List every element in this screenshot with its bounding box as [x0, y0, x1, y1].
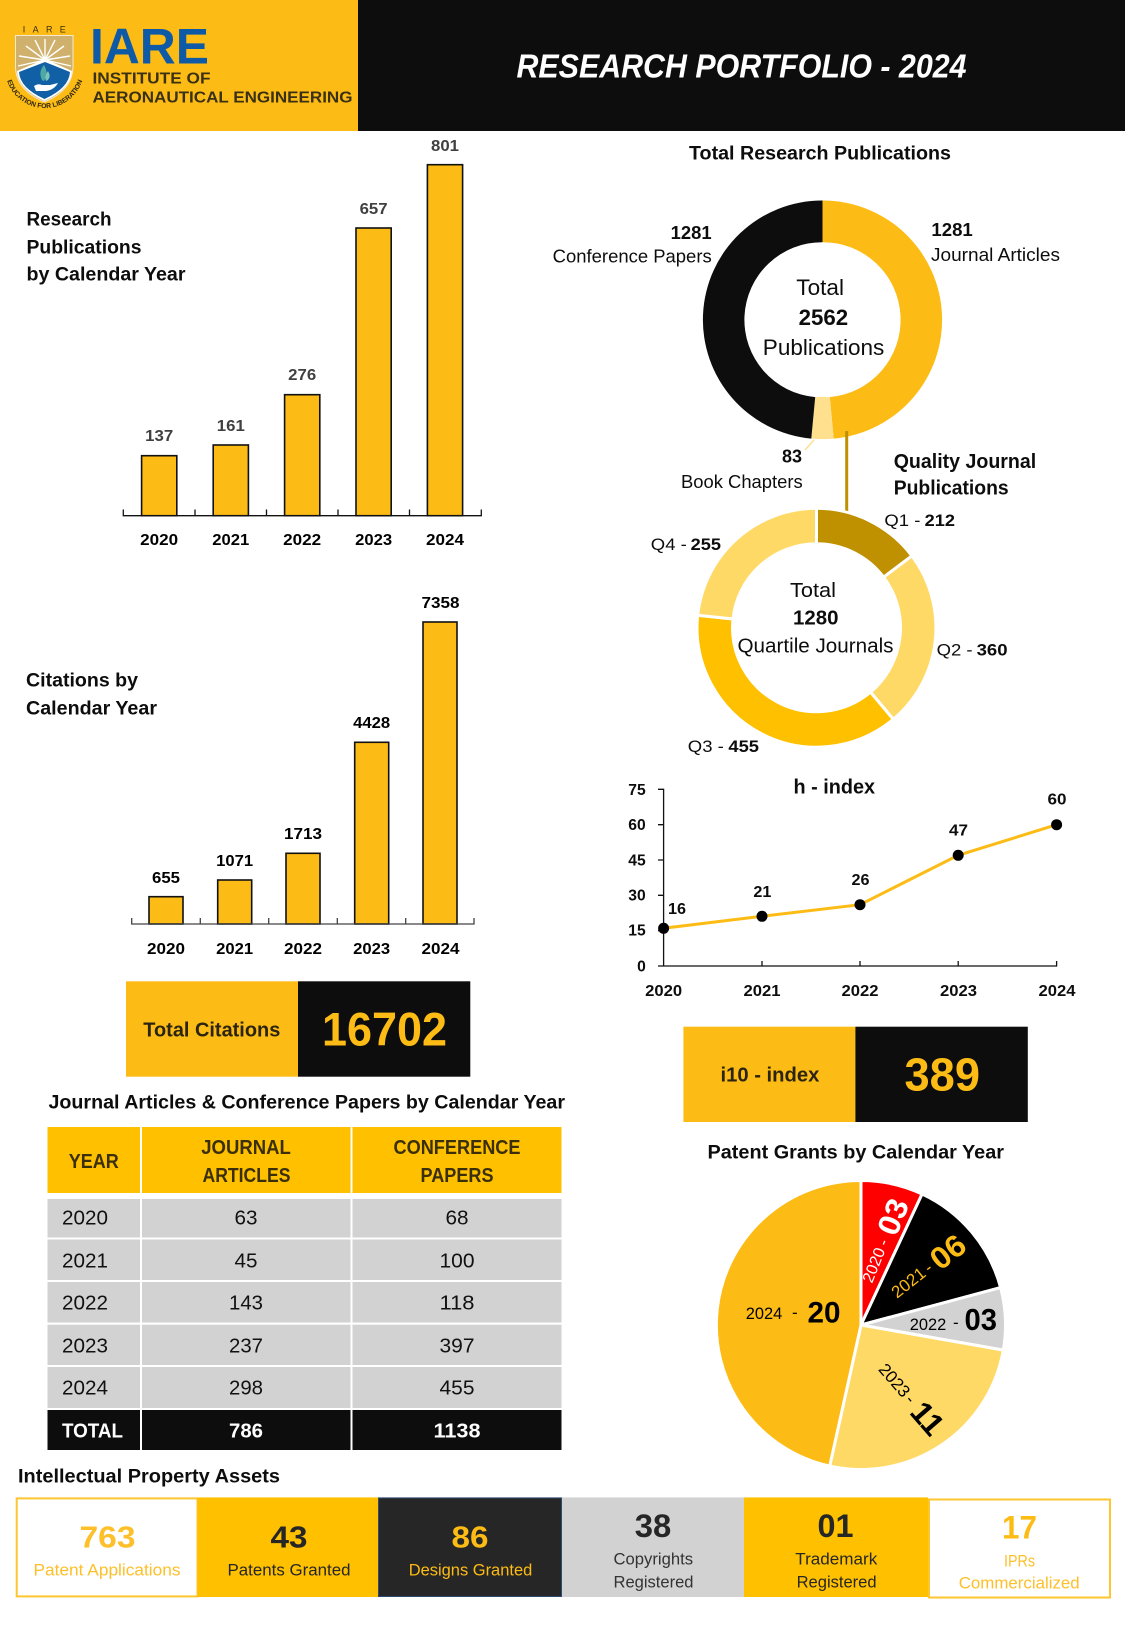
- table: articles and papers by year: [48, 1127, 562, 1450]
- table: articles and papers by year: YEAR: [69, 1151, 119, 1173]
- label: book chapters: Book Chapters: [681, 472, 803, 492]
- table: articles and papers by year: 2024: [62, 1378, 108, 1400]
- panel: patent grants by calendar year: [708, 1141, 1006, 1470]
- label: journal articles: [931, 220, 1060, 265]
- callout: total citations: Total Citations: [143, 1020, 280, 1042]
- bar chart: 2020: [140, 532, 178, 549]
- pie label: 2022: [910, 1302, 997, 1337]
- table: articles and papers by year: 2023: [62, 1336, 108, 1358]
- quartile labels: Q3 -: [688, 737, 724, 756]
- bar chart: 2023: [353, 941, 390, 958]
- table: articles and papers by year: 298: [229, 1378, 263, 1400]
- card: designs granted: Designs Granted: [409, 1560, 532, 1580]
- heading: [26, 670, 158, 720]
- donut centre text: 1280: [793, 608, 838, 630]
- heading: Citations by: [26, 670, 138, 692]
- pie label: 2024: 2024: [746, 1304, 782, 1323]
- heading: [26, 210, 186, 286]
- axes: [658, 789, 1057, 966]
- bar chart: 7358: [422, 595, 460, 612]
- table: articles and papers by year: CONFERENCE: [394, 1137, 520, 1159]
- table: articles and papers by year: 68: [446, 1208, 468, 1230]
- pie label: 2023: -: [901, 1391, 920, 1408]
- card: copyrights registered: [562, 1497, 744, 1597]
- bar chart: 1071: [216, 853, 253, 870]
- axis labels: 75: [628, 782, 646, 799]
- quartile labels: Q4 -: [651, 535, 687, 554]
- quartile labels: 360: [977, 641, 1008, 660]
- table: articles and papers by year: ARTICLES: [202, 1165, 290, 1187]
- heading: by Calendar Year: [26, 264, 186, 286]
- heading: Research: [26, 210, 112, 230]
- table: articles and papers by year: TOTAL: [62, 1420, 123, 1442]
- axis labels: 45: [628, 852, 646, 869]
- data line: [658, 819, 1062, 934]
- heading: [894, 451, 1036, 500]
- donut centre text: 2562: [799, 305, 848, 330]
- card: IPRs commercialized: IPRs: [1004, 1552, 1035, 1571]
- pie label: 2021: 2021: [888, 1264, 929, 1302]
- card: patent applications: [17, 1498, 198, 1596]
- table: articles and papers by year: 455: [440, 1378, 474, 1400]
- table: articles and papers by year: 397: [440, 1336, 474, 1358]
- bar chart: 2022: [284, 941, 322, 958]
- card: patent applications: Patent Applications: [34, 1560, 180, 1580]
- icon: IARE logo shield: EDUCATION FOR LIBERATION: [7, 79, 82, 108]
- donut chart: publications: [703, 200, 942, 450]
- bar chart: 655: [152, 870, 180, 887]
- pie label: 2022: 03: [964, 1302, 997, 1337]
- axis labels: 15: [628, 923, 646, 940]
- table: articles and papers by year: 1138: [434, 1420, 480, 1442]
- callout: i10 index: 389: [904, 1049, 980, 1101]
- callout: total citations: [126, 981, 470, 1077]
- label: conference papers: [553, 223, 712, 266]
- panel: h-index line chart: [628, 776, 1076, 1000]
- donut centre text: Total: [796, 275, 844, 300]
- pie label: 2020: 2020: [860, 1245, 889, 1285]
- axis labels: [628, 782, 1076, 1000]
- heading: Quality Journal: [894, 451, 1036, 473]
- donut centre text: Publications: [763, 335, 884, 360]
- heading: h - index: [794, 776, 875, 798]
- bar chart: 2024: [426, 532, 464, 549]
- heading: Total Research Publications: [689, 144, 951, 164]
- bar chart: 276: [288, 367, 316, 384]
- data labels: [668, 792, 1067, 918]
- heading: Patent Grants by Calendar Year: [708, 1141, 1004, 1163]
- pie label: 2023: 11: [903, 1395, 951, 1443]
- card: patent applications: 763: [80, 1520, 136, 1554]
- panel: intellectual property assets: [17, 1497, 1110, 1598]
- pie label: 2024: [746, 1296, 840, 1329]
- panel: research publications by calendar year: [26, 138, 481, 549]
- brand name: IARE: [90, 18, 209, 74]
- label: book chapters: 83: [782, 446, 802, 466]
- card: patents granted: 43: [270, 1520, 308, 1554]
- bar chart: 2021: [216, 941, 253, 958]
- heading: Publications: [26, 238, 142, 258]
- axis labels: 2021: [744, 983, 781, 1000]
- icon: IARE logo shield: IARE: [23, 24, 66, 34]
- axis labels: 2024: [1038, 983, 1076, 1000]
- heading: journal articles and conference papers: Journal Articles & Conference Papers by Calendar Year: [48, 1092, 565, 1114]
- quartile labels: 212: [925, 511, 955, 530]
- bar chart: [132, 595, 474, 958]
- pie label: 2024: -: [792, 1303, 798, 1322]
- pie label: 2021: [883, 1227, 973, 1308]
- bar chart: 2022: [283, 532, 321, 549]
- bar chart: 2021: [212, 532, 249, 549]
- bar chart: [123, 138, 481, 549]
- axis labels: 2022: [842, 983, 879, 1000]
- data labels: 60: [1048, 792, 1067, 809]
- card: trademark registered: 01: [818, 1508, 854, 1544]
- panel: total research publications: [553, 144, 1060, 492]
- bar chart: 657: [360, 201, 388, 218]
- card: trademark registered: Trademark: [795, 1549, 878, 1568]
- label: conference papers: 1281: [671, 223, 712, 243]
- card: IPRs commercialized: [929, 1500, 1110, 1598]
- card: copyrights registered: Registered: [614, 1572, 694, 1591]
- pie label: 2021: 06: [923, 1227, 973, 1277]
- callout: i10 index: [683, 1027, 1028, 1122]
- pie label: 2020: 03: [870, 1194, 916, 1240]
- label: book chapters: [681, 446, 803, 492]
- institute name: [92, 70, 352, 106]
- card: trademark registered: [744, 1497, 928, 1597]
- quartile labels: Q2 -: [937, 641, 973, 660]
- label: journal articles: 1281: [931, 220, 973, 240]
- axis labels: 30: [628, 888, 646, 905]
- axis labels: 2023: [940, 983, 977, 1000]
- label: conference papers: Conference Papers: [553, 246, 712, 266]
- bar chart: 801: [431, 138, 459, 155]
- donut centre text: [763, 275, 884, 360]
- label: journal articles: Journal Articles: [931, 245, 1060, 265]
- card: patents granted: [198, 1497, 378, 1597]
- heading: intellectual property assets: Intellectual Property Assets: [18, 1466, 280, 1488]
- pie label: 2021: -: [920, 1258, 936, 1277]
- card: copyrights registered: 38: [635, 1508, 671, 1544]
- quartile labels: [651, 511, 1008, 756]
- card: IPRs commercialized: Commercialized: [959, 1574, 1080, 1593]
- table: articles and papers by year: 2022: [62, 1292, 108, 1314]
- table: articles and papers by year: PAPERS: [420, 1165, 494, 1187]
- card: copyrights registered: Copyrights: [614, 1549, 693, 1568]
- bar chart: 4428: [353, 715, 390, 732]
- table: articles and papers by year: 237: [229, 1336, 263, 1358]
- pie label: 2023: [869, 1355, 951, 1443]
- bar chart: 2024: [422, 941, 460, 958]
- pie label: 2022: 2022: [910, 1315, 946, 1334]
- pie label: 2020: [851, 1194, 916, 1288]
- panel: quality journal publications: [651, 451, 1036, 756]
- table: articles and papers by year: 63: [234, 1208, 258, 1230]
- data labels: 16: [668, 901, 686, 918]
- connector line: [845, 431, 848, 514]
- quartile labels: 255: [691, 535, 721, 554]
- institute name: INSTITUTE OF: [92, 70, 211, 88]
- data labels: 26: [852, 872, 870, 889]
- table: articles and papers by year: 100: [440, 1250, 474, 1272]
- pie label: 2023: 2023: [875, 1360, 914, 1401]
- table: articles and papers by year: 45: [234, 1250, 258, 1272]
- bar chart: 1713: [284, 826, 322, 843]
- institute name: AERONAUTICAL ENGINEERING: [92, 90, 352, 106]
- callout: total citations: 16702: [322, 1003, 447, 1056]
- donut centre text: Total: [790, 580, 836, 602]
- card: designs granted: [378, 1498, 562, 1596]
- donut centre text: [738, 580, 894, 657]
- table: articles and papers by year: 2021: [62, 1250, 108, 1272]
- bar chart: 161: [217, 418, 245, 435]
- heading: Publications: [894, 478, 1009, 500]
- quartile labels: 455: [728, 737, 759, 756]
- pie label: 2020: -: [875, 1237, 893, 1248]
- axis labels: 60: [628, 817, 646, 834]
- pie label: 2022: -: [953, 1313, 959, 1332]
- card: designs granted: 86: [452, 1520, 488, 1554]
- table: articles and papers by year: 2020: [62, 1208, 108, 1230]
- data labels: 21: [753, 884, 772, 901]
- icon: IARE logo shield: [7, 24, 82, 108]
- axis labels: 0: [637, 958, 646, 975]
- header band: [0, 0, 1125, 131]
- pie label: 2024: 20: [808, 1296, 840, 1329]
- panel: citations by calendar year: [26, 595, 474, 958]
- heading: Calendar Year: [26, 698, 158, 720]
- callout: i10 index: i10 - index: [720, 1065, 819, 1087]
- axis labels: 2020: [645, 983, 682, 1000]
- bar chart: 2020: [147, 941, 185, 958]
- card: patents granted: Patents Granted: [228, 1560, 350, 1580]
- bar chart: 2023: [355, 532, 392, 549]
- card: trademark registered: Registered: [797, 1572, 877, 1591]
- table: articles and papers by year: 118: [440, 1292, 474, 1314]
- quartile labels: Q1 -: [884, 511, 920, 530]
- table: articles and papers by year: JOURNAL: [201, 1137, 291, 1159]
- title: RESEARCH PORTFOLIO - 2024: [516, 48, 966, 84]
- card: IPRs commercialized: 17: [1002, 1510, 1037, 1546]
- data labels: 47: [949, 823, 968, 840]
- pie chart: [716, 1180, 1006, 1470]
- donut chart: quartiles: [697, 508, 936, 747]
- table: articles and papers by year: 143: [229, 1292, 263, 1314]
- table: articles and papers by year: 786: [229, 1420, 263, 1442]
- bar chart: 137: [145, 428, 173, 445]
- donut centre text: Quartile Journals: [738, 635, 894, 657]
